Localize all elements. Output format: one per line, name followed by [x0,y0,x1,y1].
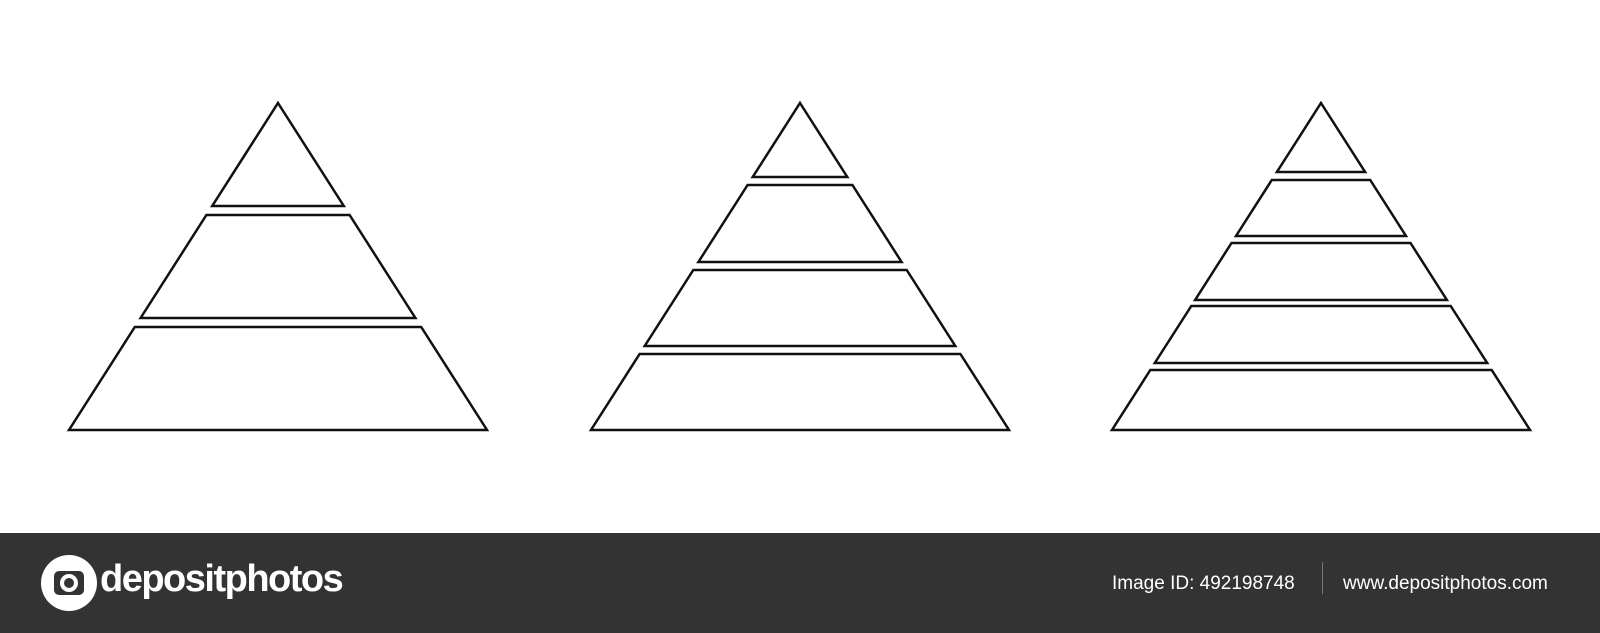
image id: Image ID: 492198748 [1112,573,1295,594]
footer bar [0,533,1600,633]
logo icon [41,555,97,611]
pyramid: four tiers [591,103,1009,430]
pyramid: three tiers [69,103,487,430]
logo text: depositphotos [100,558,342,600]
website url: www.depositphotos.com [1343,573,1548,594]
pyramid: five tiers [1112,103,1530,430]
